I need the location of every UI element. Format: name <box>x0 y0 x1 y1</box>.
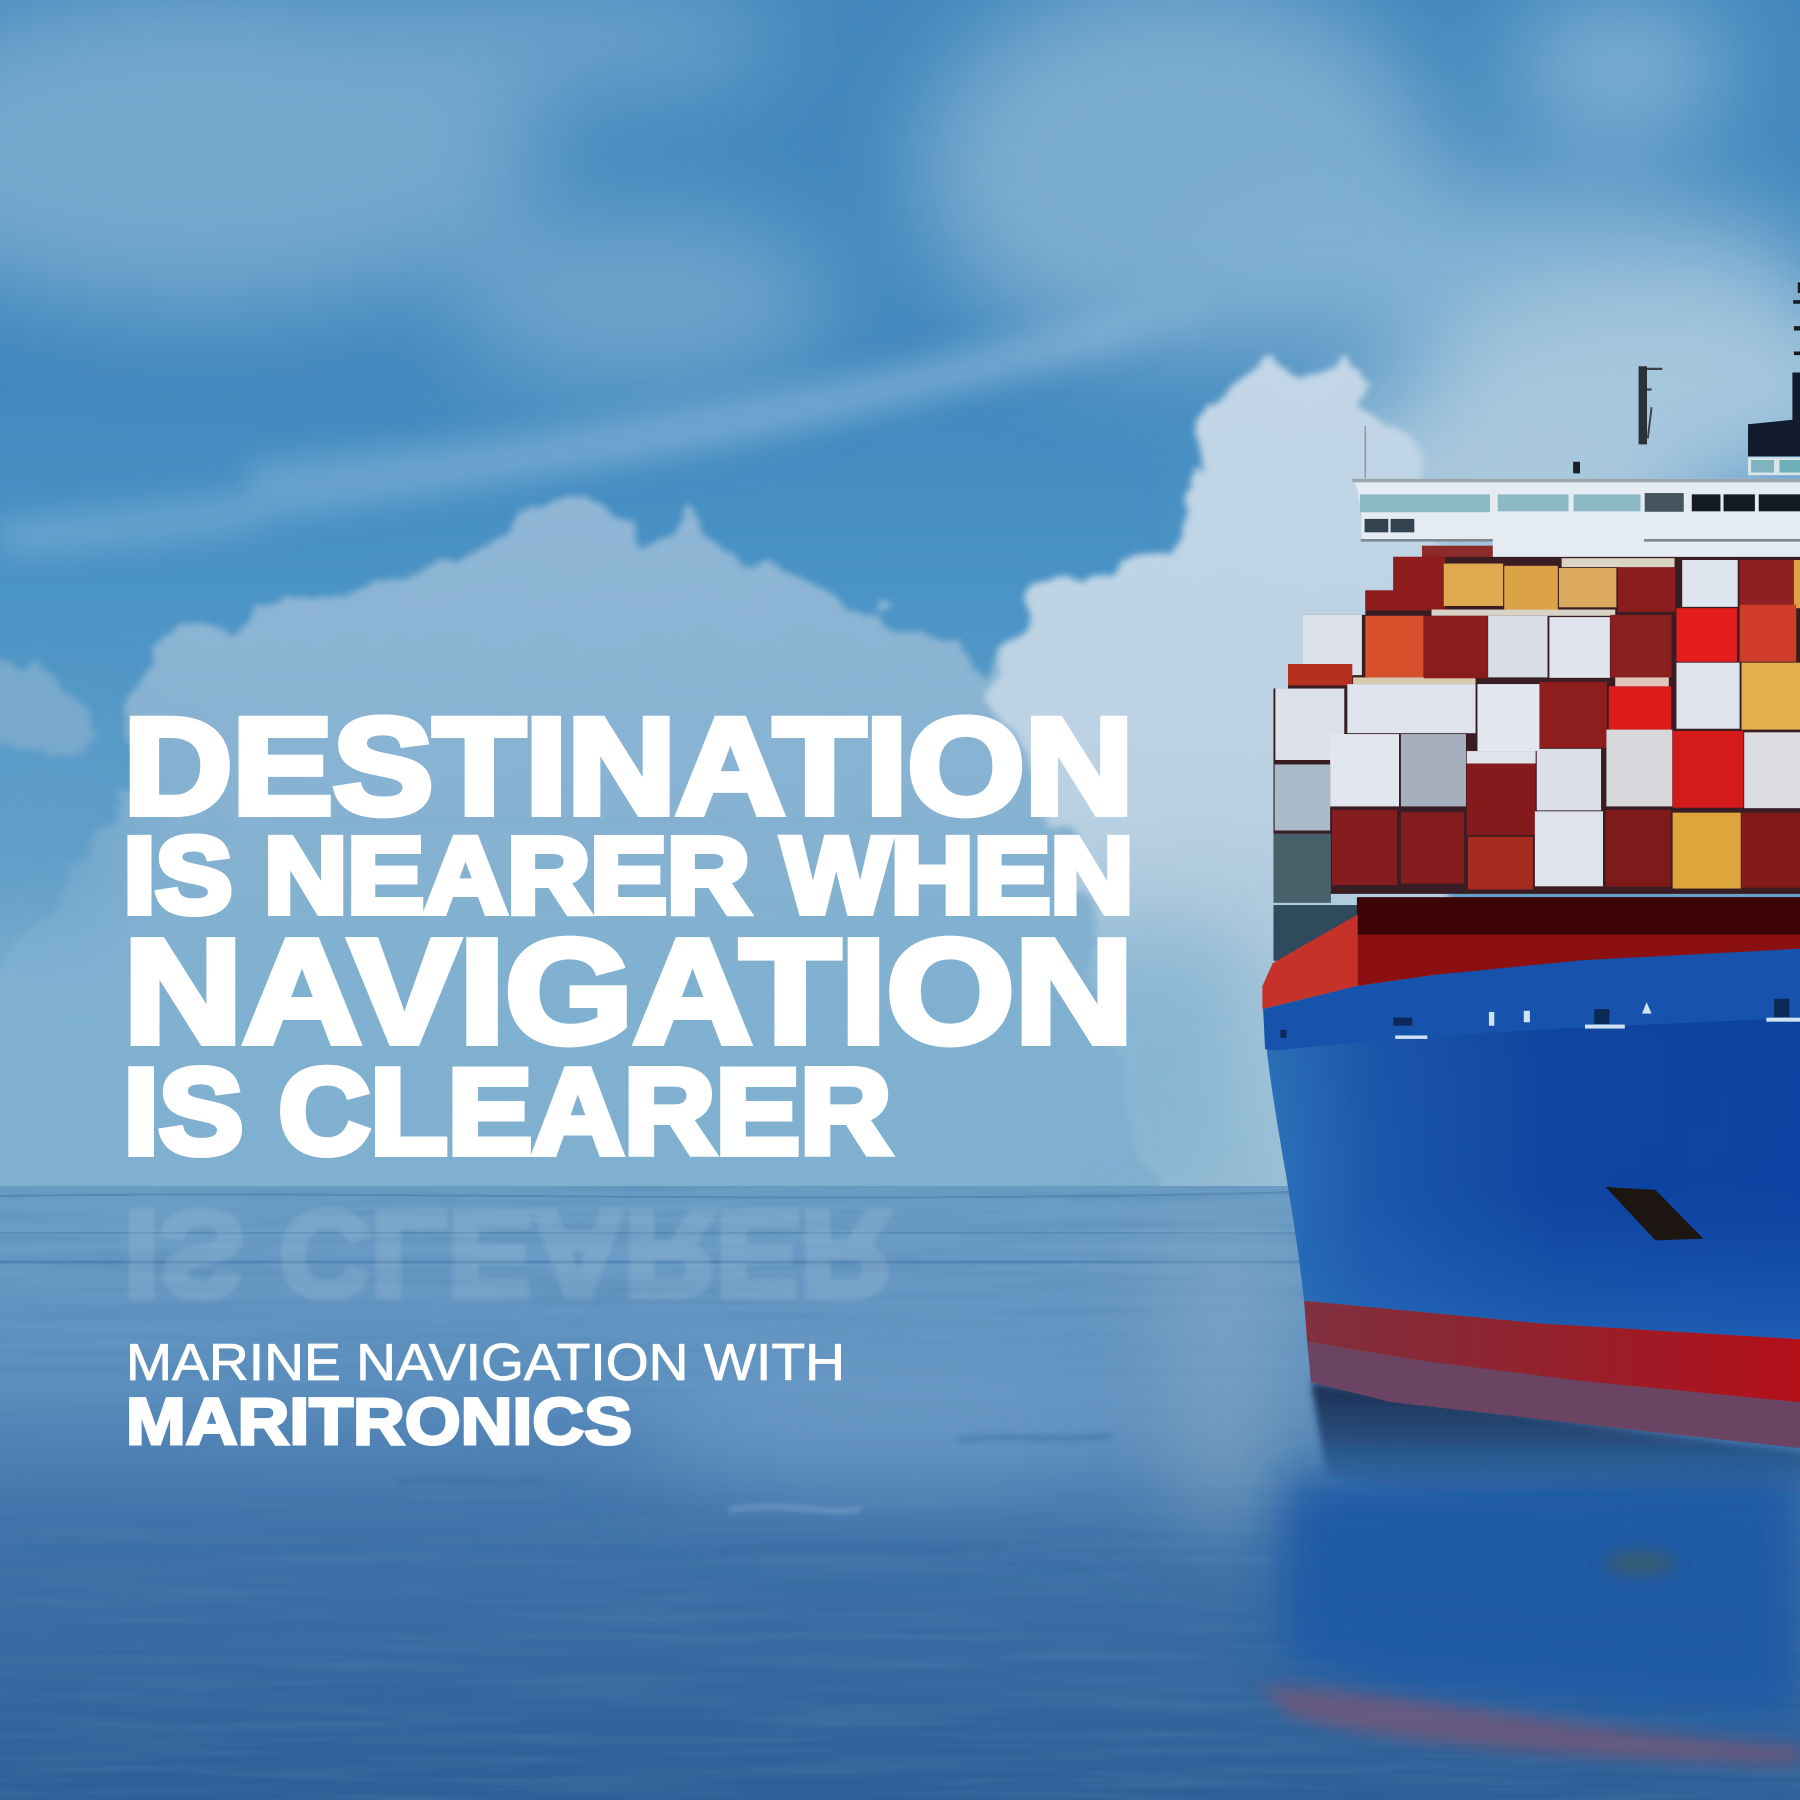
waterline shadow <box>1311 1382 1800 1508</box>
antenna <box>1363 426 1367 478</box>
headline line 3: NAVIGATION <box>124 910 1134 1074</box>
headline <box>124 690 1134 1180</box>
third row containers <box>1275 689 1344 760</box>
reflected headline on water: IS CLEARER <box>124 1186 892 1322</box>
brand name: MARITRONICS <box>126 1384 632 1458</box>
red bow bulwark <box>1262 914 1358 1009</box>
blue hull body <box>1263 949 1800 1339</box>
fifth row containers <box>1332 810 1397 885</box>
radar fittings <box>1793 282 1800 355</box>
subheading <box>126 1334 845 1458</box>
cumulus cloud bank, left <box>0 495 1250 1210</box>
subheading line 1: MARINE NAVIGATION WITH <box>126 1334 845 1392</box>
ship: hull <box>1262 897 1800 1508</box>
stack backing <box>1273 557 1800 894</box>
small cloud at left edge <box>0 650 90 750</box>
upper hull band <box>1263 949 1800 1050</box>
container tops <box>1432 610 1615 616</box>
boot topping red <box>1304 1301 1800 1402</box>
background: sea <box>0 1186 1800 1800</box>
headline line 4: IS CLEARER <box>124 1044 892 1180</box>
cirrus streaks <box>0 300 1200 548</box>
boot topping lower <box>1307 1342 1800 1448</box>
headline line 1: DESTINATION <box>124 690 1134 844</box>
horizon lines <box>0 1192 1300 1262</box>
ship reflection on water <box>1258 1470 1800 1765</box>
background: sky <box>0 0 1800 1210</box>
pale glare on water <box>640 1230 1280 1520</box>
ripples <box>400 1436 1110 1550</box>
mast <box>1639 366 1647 444</box>
dark deck band <box>1357 897 1800 940</box>
lower sky haze <box>0 730 1250 1200</box>
deck fittings <box>1395 1002 1800 1039</box>
fourth row containers <box>1330 734 1399 806</box>
second row containers <box>1303 615 1362 675</box>
bridge deck <box>1352 479 1800 561</box>
high cloud haze <box>0 0 1800 630</box>
left column containers <box>1275 764 1330 830</box>
bridge windows <box>1360 494 1640 512</box>
anchor pocket <box>1606 1187 1703 1240</box>
ship: container stack <box>1273 557 1800 961</box>
headline line 2: IS NEARER WHEN <box>124 814 1134 936</box>
ship: superstructure and mast <box>1352 282 1800 561</box>
funnel <box>1748 372 1800 456</box>
top row containers <box>1365 557 1445 610</box>
cumulus cloud bank, right <box>985 355 1450 1210</box>
